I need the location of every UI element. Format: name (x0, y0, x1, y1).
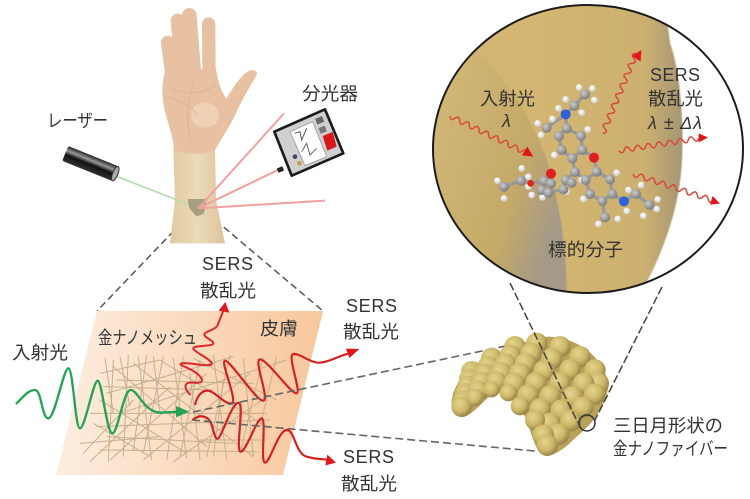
label: SERS scattered light top: SERS (202, 254, 253, 274)
palm creases (165, 83, 216, 140)
label: target molecule: 標的分子 (548, 240, 623, 260)
red scattered wave: down (193, 403, 336, 465)
scattered wavy arrow right (619, 133, 708, 153)
zoom guide lines: wrist to skin panel (97, 213, 323, 311)
label: incident light λ (480, 89, 535, 131)
label: incident light: 入射光 (12, 343, 68, 363)
fingers (168, 15, 209, 80)
label: SERS scattered light λ ± Δλ: SERS (650, 65, 700, 85)
label: SERS scattered light λ ± Δλ (647, 65, 703, 133)
red scattered wave: up (180, 302, 229, 395)
label: spectrometer: 分光器 (302, 84, 358, 104)
label: SERS scattered light right: SERS (346, 296, 397, 316)
label: skin: 皮膚 (260, 319, 298, 339)
incident wavy arrow (450, 116, 533, 157)
label: SERS scattered light top: 散乱光 (200, 281, 256, 301)
icon: spectrometer (274, 109, 343, 176)
palm highlight (191, 102, 219, 128)
lens outline (433, 5, 743, 293)
panel: skin with gold nanomesh (17, 302, 359, 475)
label: SERS scattered light right: 散乱光 (343, 322, 399, 342)
red scattered wave: right (195, 349, 359, 405)
gold nanomesh fibers (80, 355, 287, 462)
label: crescent gold nanofiber: 三日月形状の (613, 416, 723, 436)
label: SERS scattered light λ ± Δλ: 散乱光 (648, 89, 703, 109)
wrist sensor patch (188, 199, 207, 217)
gold grain surfaces (425, 0, 682, 295)
zoom guide lines: nanofiber to lens (510, 283, 662, 423)
label: gold nanomesh: 金ナノメッシュ (98, 328, 197, 348)
label: SERS scattered light bottom: 散乱光 (341, 474, 397, 494)
red scattered beams (198, 113, 325, 208)
green incident wave (17, 368, 189, 433)
forearm (170, 148, 225, 243)
target molecule (494, 84, 661, 227)
red wavy arrows (450, 50, 720, 205)
label: SERS scattered light λ ± Δλ: λ ± Δλ (647, 113, 702, 133)
zoom guide lines: mesh to nanofiber (192, 343, 535, 451)
label: SERS scattered light right (343, 296, 399, 342)
crescent gold nanofiber (451, 333, 609, 456)
label: SERS scattered light bottom: SERS (343, 447, 394, 467)
arm and hand (162, 15, 257, 243)
green laser beam (117, 177, 190, 205)
palm and thumb (162, 68, 257, 154)
scattered wavy arrow up (603, 50, 641, 133)
scattered wavy arrow lower right (633, 174, 720, 205)
label: laser: レーザー (47, 111, 108, 131)
label: SERS scattered light top (200, 254, 256, 301)
label: incident light λ: λ (501, 111, 511, 131)
small circle marker (579, 415, 595, 431)
label: crescent gold nanofiber (613, 416, 728, 459)
panel: magnified lens (425, 0, 743, 295)
label: incident light λ: 入射光 (480, 89, 535, 109)
skin parallelogram (56, 311, 323, 475)
fiber silhouette (452, 337, 608, 456)
light beams (117, 113, 325, 217)
label: SERS scattered light bottom (341, 447, 397, 494)
icon: laser (62, 146, 121, 182)
